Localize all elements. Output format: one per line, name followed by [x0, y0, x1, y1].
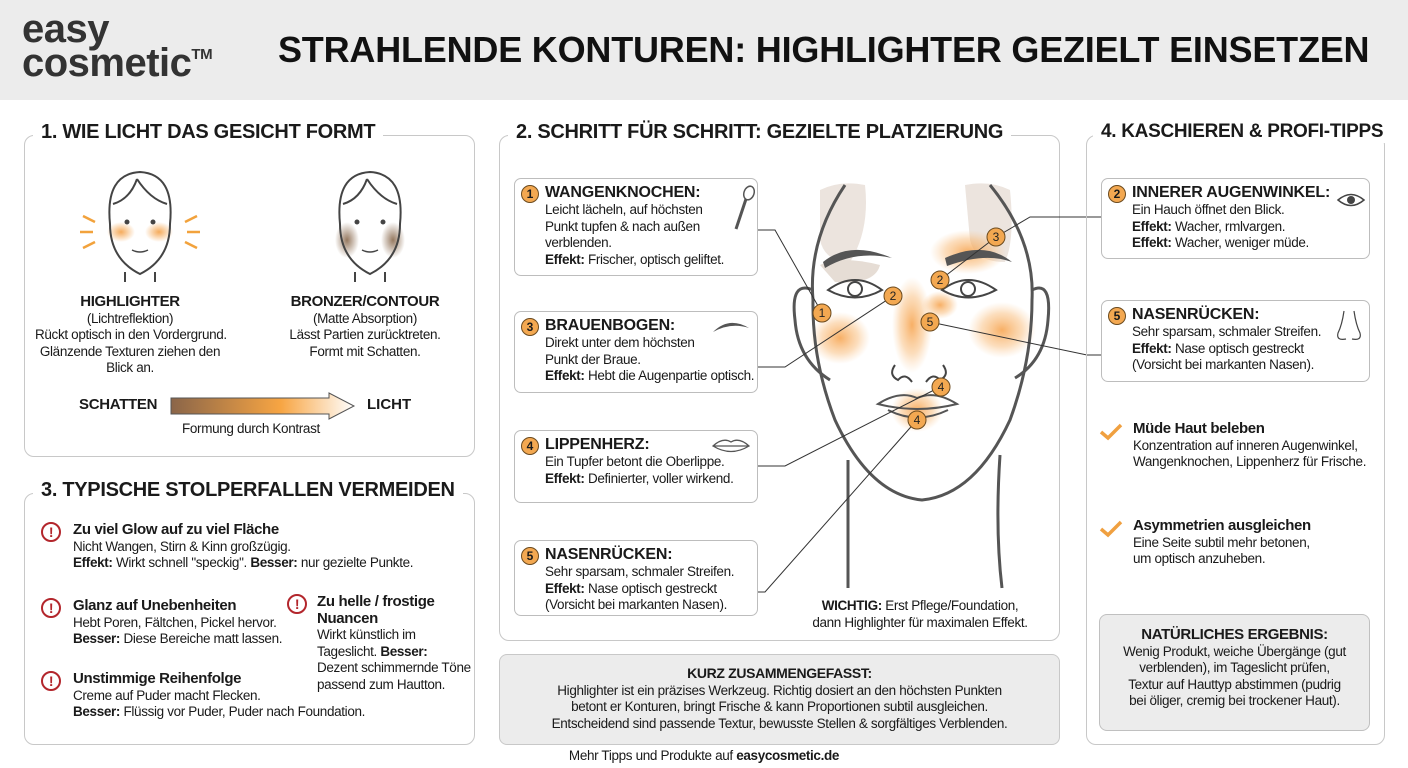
highlighter text: (Lichtreflektion): [87, 310, 173, 326]
panel 1 heading: 1. WIE LICHT DAS GESICHT FORMT: [41, 121, 375, 143]
card: innerer augenwinkel: 2: [1114, 187, 1120, 201]
panel 3: pitfalls: [24, 493, 475, 745]
summary box: Highlighter ist ein präzises Werkzeug. Richtig dosiert an den höchsten Punkten: [557, 682, 1002, 698]
highlighter text: Glänzende Texturen ziehen den: [40, 344, 220, 358]
card: wangenknochen: 1: [527, 187, 533, 201]
bronzer text: Lässt Partien zurücktreten.: [289, 327, 441, 342]
pitfall 1: Nicht Wangen, Stirn & Kinn großzügig.: [73, 538, 291, 554]
card: nasenruecken: NASENRÜCKEN:: [545, 546, 672, 563]
panel 2 heading: 2. SCHRITT FÜR SCHRITT: GEZIELTE PLATZIERUNG: [516, 121, 1003, 143]
summary box: Entscheidend sind passende Textur, bewusste Stellen & sorgfältiges Verblenden.: [552, 716, 1007, 730]
card: lippenherz: 4: [527, 439, 533, 453]
natural result box: [1099, 614, 1370, 731]
natural result box: bei öliger, cremig bei trockener Haut).: [1129, 693, 1340, 708]
card: innerer augenwinkel: Effekt: Wacher, weniger müde.: [1132, 235, 1309, 250]
pitfall 1: !: [49, 524, 53, 540]
card: brauenbogen: Punkt der Braue.: [545, 352, 641, 366]
gradient arrow: Formung durch Kontrast: [182, 421, 320, 436]
highlighter text: [35, 293, 227, 375]
wichtig note: WICHTIG: Erst Pflege/Foundation,: [822, 598, 1018, 613]
pitfall 4: [41, 670, 365, 719]
gradient arrow: LICHT: [367, 396, 411, 413]
tip: müde haut: Wangenknochen, Lippenherz für Frische.: [1133, 454, 1366, 469]
tip: müde haut: Konzentration auf inneren Augenwinkel,: [1133, 438, 1358, 452]
card: wangenknochen: Effekt: Frischer, optisch geliftet.: [545, 252, 724, 266]
connector lines: [757, 217, 1101, 592]
natural result box: Wenig Produkt, weiche Übergänge (gut: [1123, 644, 1346, 658]
logo: [22, 7, 212, 85]
card: wangenknochen: Leicht lächeln, auf höchsten: [545, 202, 703, 217]
pitfall 3: [287, 593, 471, 692]
card: wangenknochen: Punkt tupfen & nach außen: [545, 218, 700, 234]
numbered markers: [813, 228, 1005, 429]
numbered markers: 1: [819, 306, 826, 320]
bronzer text: [289, 293, 441, 358]
tip: müde haut: [1100, 420, 1366, 469]
card: brauenbogen: 3: [527, 320, 533, 334]
numbered markers: 4: [914, 413, 921, 427]
wichtig note: dann Highlighter für maximalen Effekt.: [812, 614, 1028, 630]
pitfall 2: Hebt Poren, Fältchen, Pickel hervor.: [73, 614, 277, 630]
highlighter text: Blick an.: [106, 360, 154, 375]
logo: easy: [22, 7, 109, 51]
pitfall 4: Creme auf Puder macht Flecken.: [73, 688, 261, 702]
card: nasenruecken 2: 5: [1114, 309, 1120, 323]
numbered markers: 5: [927, 315, 934, 329]
card: brauenbogen: Effekt: Hebt die Augenpartie optisch.: [545, 368, 754, 383]
summary box: betont er Konturen, bringt Frische & kann Proportionen subtil ausgleichen.: [571, 699, 988, 714]
pitfall 3: Dezent schimmernde Töne: [317, 660, 471, 675]
highlighter text: Rückt optisch in den Vordergrund.: [35, 327, 227, 342]
card: lippenherz: [514, 430, 758, 503]
icon: brush: [734, 185, 755, 230]
card: wangenknochen: WANGENKNOCHEN:: [545, 184, 700, 201]
summary box: [499, 654, 1060, 745]
card: nasenruecken: [514, 540, 758, 616]
icon: nose: [1337, 310, 1361, 340]
pitfall 4: Besser: Flüssig vor Puder, Puder nach Foundation.: [73, 704, 365, 719]
icon: lips: [712, 440, 750, 452]
natural result box: NATÜRLICHES ERGEBNIS:: [1141, 626, 1328, 643]
panel 4: tips: [1086, 135, 1385, 745]
tip: asymmetrien: Eine Seite subtil mehr betonen,: [1133, 534, 1310, 550]
header band: [0, 0, 1408, 100]
icon: highlighter face: [80, 171, 200, 282]
pitfall 2: [41, 597, 282, 646]
card: brauenbogen: [514, 311, 758, 393]
numbered markers: 2: [937, 273, 944, 287]
card: brauenbogen: Direkt unter dem höchsten: [545, 335, 695, 350]
tip: asymmetrien: Asymmetrien ausgleichen: [1133, 517, 1311, 534]
card: lippenherz: Effekt: Definierter, voller wirkend.: [545, 470, 733, 486]
panel 4 heading: 4. KASCHIEREN & PROFI-TIPPS: [1101, 121, 1383, 142]
footer: Mehr Tipps und Produkte auf easycosmetic.de: [569, 748, 839, 763]
natural result box: Textur auf Hauttyp abstimmen (pudrig: [1128, 676, 1341, 692]
card: innerer augenwinkel: Effekt: Wacher, rmlvargen.: [1132, 218, 1285, 234]
bronzer text: (Matte Absorption): [313, 310, 417, 326]
card: wangenknochen: verblenden.: [545, 235, 612, 250]
panel 3 heading: 3. TYPISCHE STOLPERFALLEN VERMEIDEN: [41, 479, 455, 501]
card: lippenherz: LIPPENHERZ:: [545, 436, 649, 453]
card: nasenruecken: Sehr sparsam, schmaler Streifen.: [545, 564, 734, 579]
panel 1: light: [24, 135, 475, 457]
highlighter text: HIGHLIGHTER: [80, 293, 180, 310]
numbered markers: 3: [993, 230, 1000, 244]
gradient arrow: [79, 392, 411, 436]
natural result box: verblenden), im Tageslicht prüfen,: [1139, 660, 1330, 675]
card: lippenherz: Ein Tupfer betont die Oberlippe.: [545, 454, 724, 469]
bronzer text: Formt mit Schatten.: [309, 344, 421, 358]
pitfall 3: passend zum Hautton.: [317, 676, 445, 692]
pitfall 1: Zu viel Glow auf zu viel Fläche: [73, 521, 279, 538]
card: nasenruecken: Effekt: Nase optisch gestreckt: [545, 580, 717, 596]
summary box: KURZ ZUSAMMENGEFASST:: [687, 665, 872, 681]
pitfall 2: Glanz auf Unebenheiten: [73, 597, 236, 614]
numbered markers: 4: [938, 380, 945, 394]
pitfall 2: !: [49, 600, 53, 616]
pitfall 3: !: [295, 596, 299, 612]
numbered markers: 2: [890, 289, 897, 303]
card: innerer augenwinkel: INNERER AUGENWINKEL:: [1132, 184, 1330, 201]
card: nasenruecken: 5: [527, 549, 533, 563]
card: innerer augenwinkel: Ein Hauch öffnet den Blick.: [1132, 202, 1284, 217]
tip: asymmetrien: um optisch anzuheben.: [1133, 551, 1265, 566]
tip: asymmetrien: [1100, 517, 1311, 566]
wichtig note: [812, 598, 1028, 630]
card: nasenruecken 2: (Vorsicht bei markanten Nasen).: [1132, 357, 1314, 372]
card: nasenruecken 2: Sehr sparsam, schmaler Streifen.: [1132, 324, 1321, 339]
pitfall 3: Nuancen: [317, 610, 378, 626]
card: wangenknochen: [514, 178, 758, 276]
gradient arrow: SCHATTEN: [79, 396, 157, 413]
card: nasenruecken: (Vorsicht bei markanten Nasen).: [545, 597, 727, 612]
pitfall 3: Tageslicht. Besser:: [317, 644, 427, 658]
pitfall 4: Unstimmige Reihenfolge: [73, 670, 241, 687]
card: brauenbogen: BRAUENBOGEN:: [545, 317, 675, 334]
title: STRAHLENDE KONTUREN: HIGHLIGHTER GEZIELT EINSETZEN: [278, 29, 1369, 70]
logo: cosmeticTM: [22, 41, 212, 85]
pitfall 3: Zu helle / frostige: [317, 593, 435, 610]
card: nasenruecken 2: Effekt: Nase optisch gestreckt: [1132, 340, 1304, 356]
bronzer text: BRONZER/CONTOUR: [291, 293, 439, 310]
pitfall 1: Effekt: Wirkt schnell "speckig". Besser: nur gezielte Punkte.: [73, 555, 413, 570]
icon: eye: [1336, 194, 1365, 206]
card: innerer augenwinkel: [1101, 178, 1370, 259]
card: nasenruecken 2: NASENRÜCKEN:: [1132, 306, 1259, 323]
pitfall 4: !: [49, 673, 53, 689]
pitfall 2: Besser: Diese Bereiche matt lassen.: [73, 631, 282, 646]
icon: bronzer face: [336, 171, 404, 282]
panel 2: placement: [499, 135, 1060, 641]
tip: müde haut: Müde Haut beleben: [1133, 420, 1265, 437]
card: nasenruecken 2: [1101, 300, 1370, 382]
pitfall 1: [41, 521, 413, 570]
pitfall 3: Wirkt künstlich im: [317, 627, 416, 642]
icon: brow: [713, 322, 749, 332]
